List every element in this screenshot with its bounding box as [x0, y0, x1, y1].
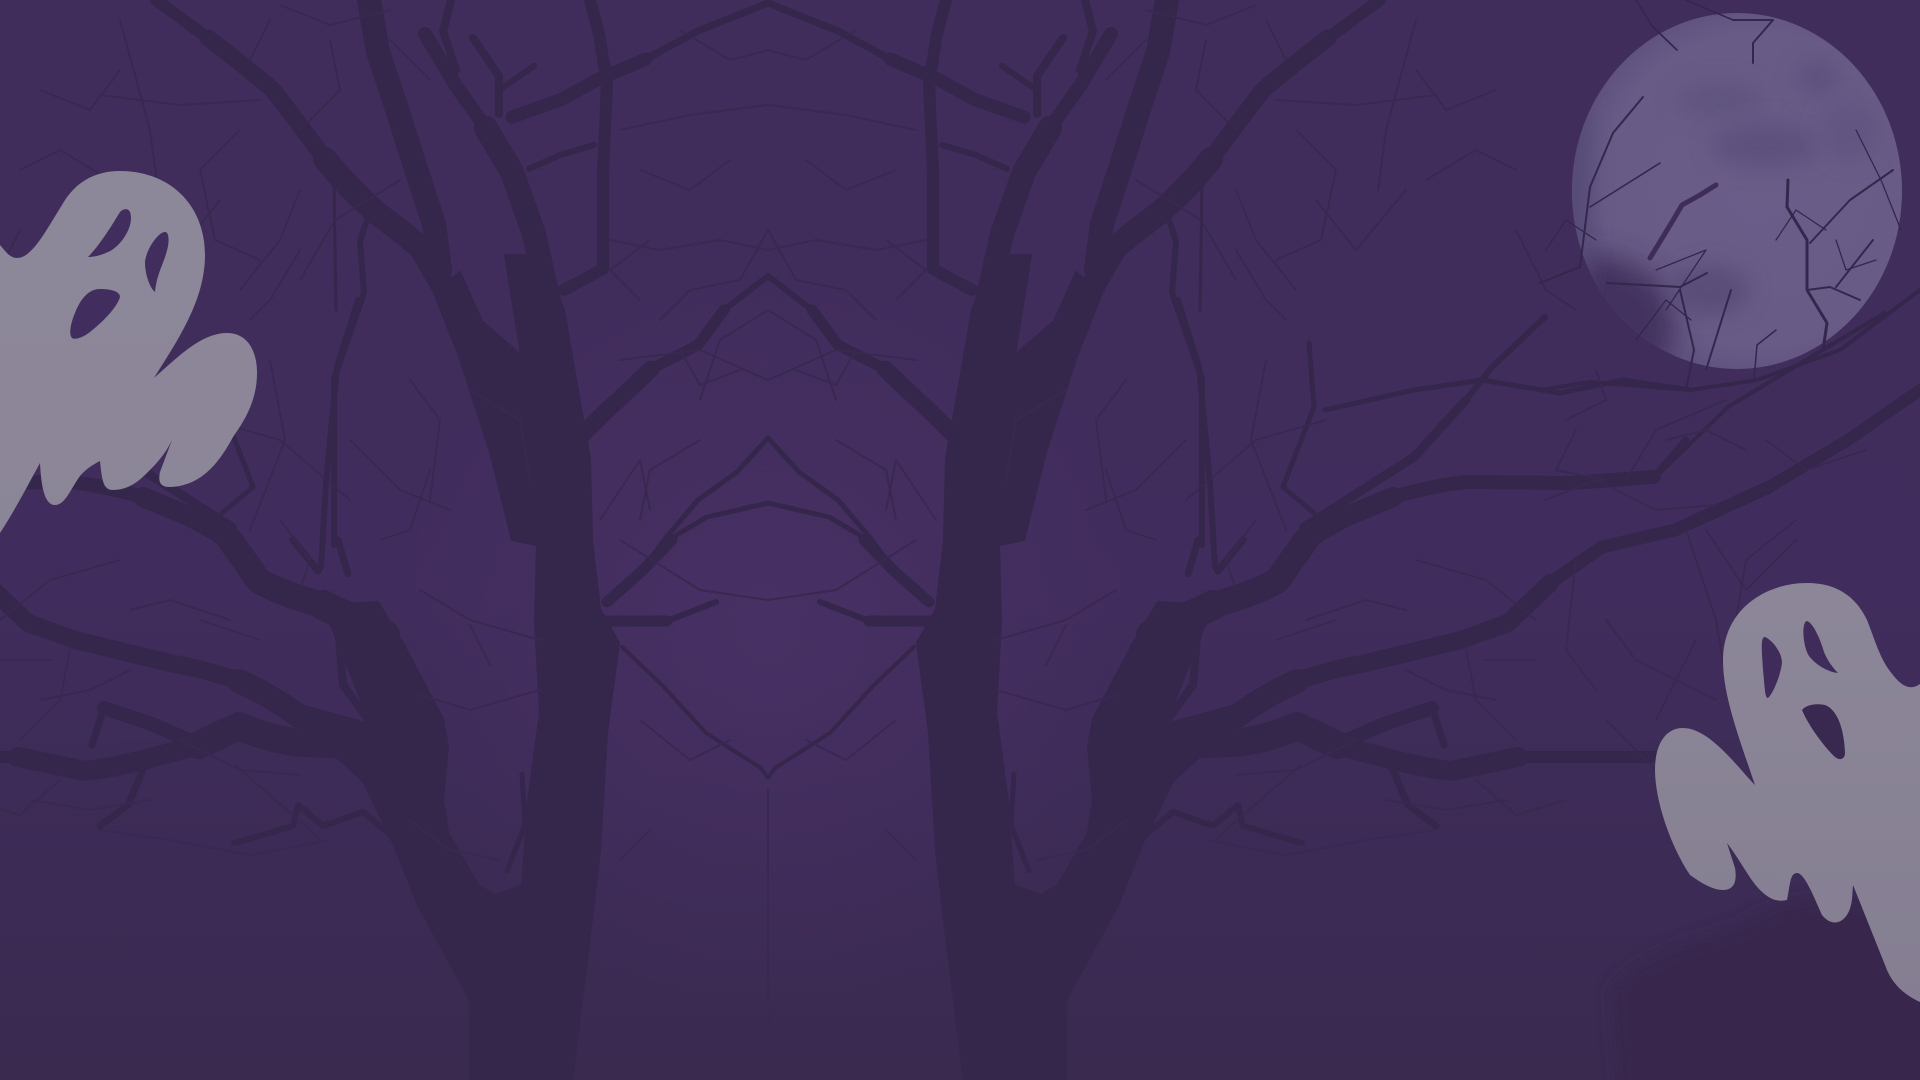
- moon: [1572, 13, 1902, 369]
- bush lower right: [1610, 898, 1920, 1080]
- twig across moon: [1650, 185, 1716, 258]
- tree: left: [0, 0, 768, 1080]
- ghost: left: [0, 171, 257, 533]
- ghost: right: [1655, 583, 1920, 1002]
- central glow: [388, 250, 1148, 1010]
- tree: right mirrored: [768, 0, 1920, 1080]
